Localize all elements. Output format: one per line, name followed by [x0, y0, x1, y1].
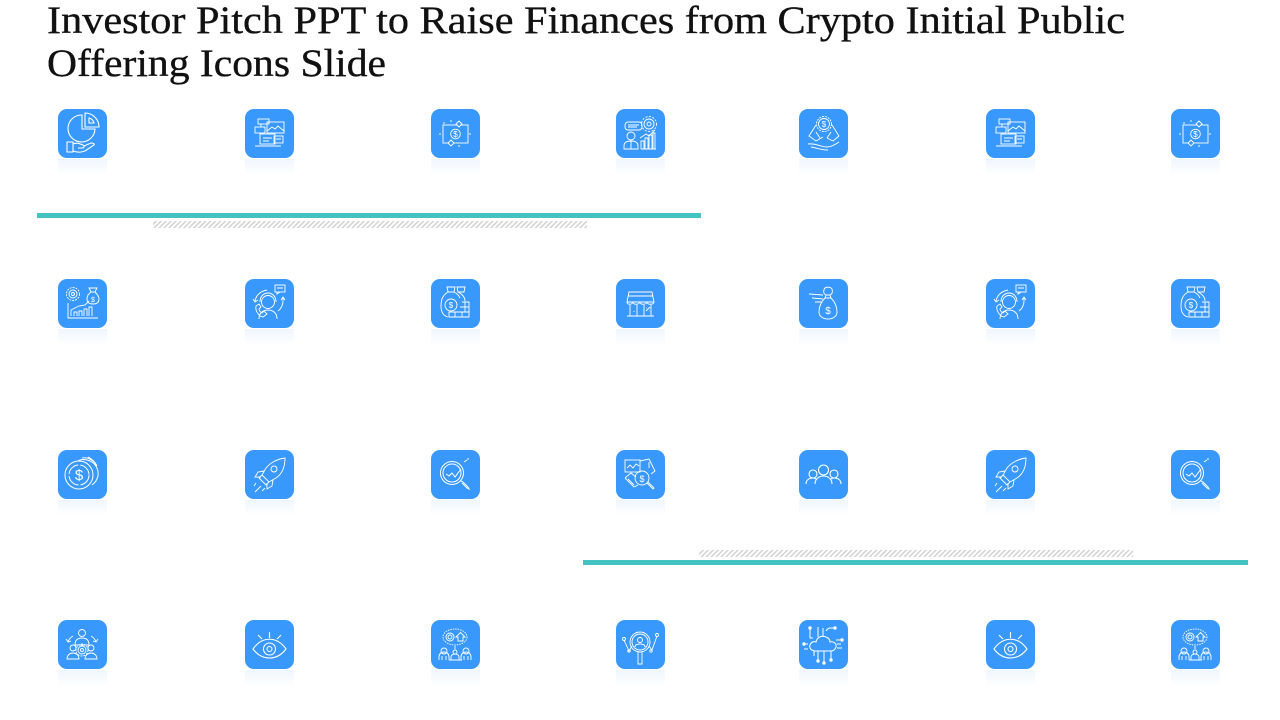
- title: Offering Icons Slide: [47, 41, 386, 85]
- icon: money bags and coins repeat: [1171, 279, 1220, 345]
- icon: storefront: [616, 279, 665, 345]
- icon: growth chart with gear and money bag: [58, 279, 107, 345]
- icon: people around gear: [58, 620, 107, 686]
- lower hatched band: [699, 550, 1133, 557]
- icon: banknote repeat: [1171, 109, 1220, 175]
- icon: money bags and coins: [431, 279, 480, 345]
- icon: dollar coins: [58, 450, 107, 516]
- icon: magnifier with person: [616, 620, 665, 686]
- icon: eye: [245, 620, 294, 686]
- upper teal divider: [37, 213, 701, 218]
- icon: person with chart and gear: [616, 109, 665, 175]
- icon: phone support agent repeat: [986, 279, 1035, 345]
- lower teal divider: [583, 560, 1248, 565]
- icon: magnifier with trend line: [431, 450, 480, 516]
- icon: eye repeat: [986, 620, 1035, 686]
- icon: moving money bag: [799, 279, 848, 345]
- icon: hand with money: [799, 109, 848, 175]
- icon: magnifier with trend line repeat: [1171, 450, 1220, 516]
- icon: people with money and home repeat: [1171, 620, 1220, 686]
- icon: rocket repeat: [986, 450, 1035, 516]
- icon: pie chart in hand: [58, 109, 107, 175]
- icon: media screens: [245, 109, 294, 175]
- upper hatched band: [153, 221, 587, 228]
- icon: media screens repeat: [986, 109, 1035, 175]
- icon: people with money and home: [431, 620, 480, 686]
- title: [47, 0, 1125, 85]
- icon: financial analysis: [616, 450, 665, 516]
- icon: phone support agent: [245, 279, 294, 345]
- icon: team of three: [799, 450, 848, 516]
- icon: rocket: [245, 450, 294, 516]
- icon: cloud network: [799, 620, 848, 686]
- icon: banknote: [431, 109, 480, 175]
